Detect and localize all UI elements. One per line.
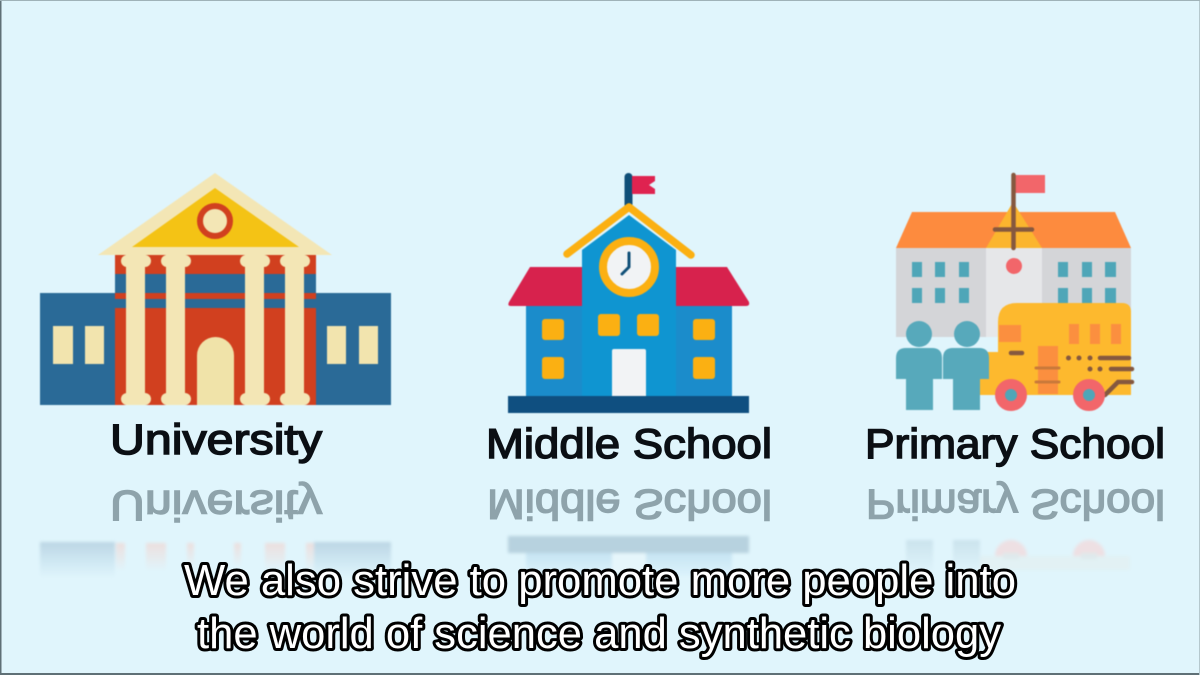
icon: primary school and bus bbox=[896, 175, 1132, 410]
reflection: middle school icon bbox=[508, 536, 749, 576]
icon: university building bbox=[40, 173, 391, 405]
reflection: primary school icon bbox=[906, 540, 1130, 574]
caption: We also strive to promote more people into bbox=[184, 557, 1016, 605]
label: Middle School: Middle School bbox=[486, 420, 772, 467]
caption bbox=[184, 557, 1016, 658]
label: Primary School: Primary School bbox=[865, 420, 1165, 467]
icon: middle school building bbox=[508, 173, 749, 413]
caption: the world of science and synthetic biology bbox=[197, 610, 1001, 658]
reflected label: Primary School: Primary School bbox=[866, 481, 1165, 528]
reflection: university icon bbox=[40, 542, 391, 578]
reflected label: University: University bbox=[110, 481, 323, 529]
label: University: University bbox=[110, 416, 323, 464]
reflected label: Middle School: Middle School bbox=[487, 481, 772, 528]
